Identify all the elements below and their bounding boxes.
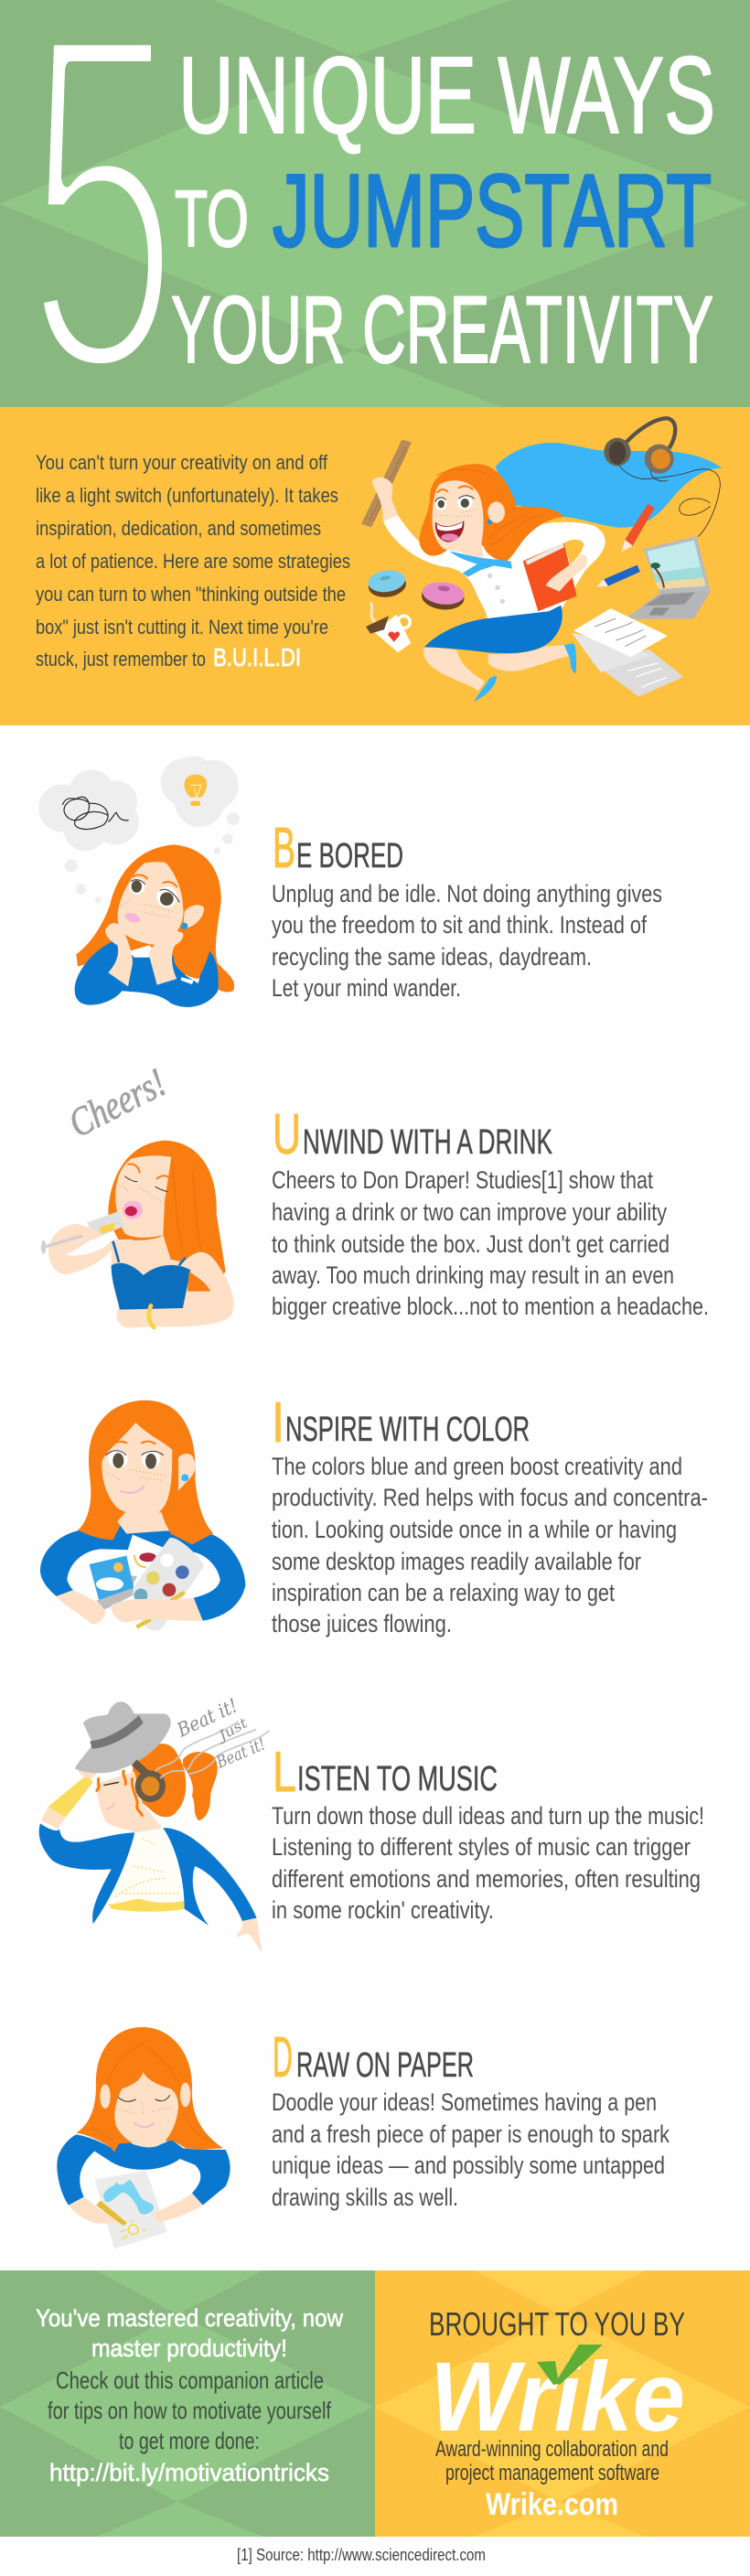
- pencil: [96, 2201, 127, 2226]
- icon: papers: [572, 608, 683, 697]
- hands: [57, 1590, 203, 1624]
- heading: [273, 1741, 498, 1804]
- callout text: to get more done:: [119, 2427, 260, 2454]
- hair strands: [436, 469, 540, 546]
- mouth: [435, 521, 464, 542]
- callout link: http://bit.ly/motivationtricks: [49, 2459, 329, 2486]
- yellow sleeve: [48, 1775, 93, 1818]
- lips: [123, 1201, 143, 1219]
- jacket: [39, 1823, 257, 1926]
- face: [114, 2072, 178, 2147]
- callout headline: [36, 2304, 343, 2362]
- hands: [105, 923, 183, 986]
- intro text: like a light switch (unfortunately). It takes: [36, 484, 338, 507]
- callout text: for tips on how to motivate yourself: [48, 2397, 332, 2424]
- body text: those juices flowing.: [272, 1610, 452, 1637]
- straps: [112, 1241, 186, 1265]
- cuff: [181, 977, 194, 984]
- face: [433, 480, 484, 553]
- hair: [78, 1401, 213, 1544]
- illustration: woman holding palette: [40, 1401, 245, 1631]
- heading: ISTEN TO MUSIC: [297, 1760, 498, 1798]
- headphones: [134, 1763, 166, 1802]
- icon: red pencil: [621, 504, 655, 552]
- heading: [273, 1103, 552, 1166]
- blouse: [383, 515, 605, 619]
- blouse: [109, 1828, 186, 1912]
- callout headline: You've mastered creativity, now: [36, 2304, 343, 2332]
- body text: [272, 2088, 670, 2211]
- closed eyes and freckles: [119, 1165, 169, 1205]
- body text: Doodle your ideas! Sometimes having a pen: [272, 2088, 657, 2116]
- panel: introduction: [0, 407, 750, 725]
- body text: recycling the same ideas, daydream.: [272, 943, 592, 971]
- buttons: [488, 574, 505, 604]
- illustration: woman drawing: [57, 2027, 230, 2249]
- face and neck: [96, 1772, 162, 1839]
- sweater: [75, 939, 219, 1007]
- blue top: [112, 1263, 190, 1310]
- scarf: [450, 552, 512, 577]
- heading: RAW ON PAPER: [296, 2046, 474, 2085]
- body text: unique ideas — and possibly some untapped: [272, 2152, 665, 2179]
- pencil: [136, 1593, 185, 1627]
- hair: [76, 844, 234, 993]
- title line: to: TO: [175, 175, 249, 263]
- eyes: [121, 875, 179, 918]
- front leg: [423, 648, 485, 691]
- sponsor description: Award-winning collaboration and: [435, 2437, 669, 2462]
- gap between arm and body: [564, 540, 584, 564]
- callout headline: master productivity!: [91, 2334, 287, 2362]
- ear and earring: [181, 905, 204, 929]
- intro text: inspiration, dedication, and sometimes: [36, 517, 321, 540]
- source footnote: [1] Source: http://www.sciencedirect.com: [237, 2546, 486, 2564]
- panel: productivity callout: [0, 2270, 375, 2537]
- forearms: [69, 2193, 203, 2224]
- illustration: superhero woman with creative objects: [361, 418, 722, 702]
- intro text: stuck, just remember to: [36, 648, 206, 671]
- wrike logo: Wrike: [430, 2341, 685, 2452]
- panel: brought to you by wrike: [375, 2270, 750, 2537]
- illustration: daydreaming woman: [38, 757, 240, 1007]
- body text: in some rockin' creativity.: [272, 1896, 494, 1924]
- sound waves: [155, 1722, 269, 1778]
- body text: [272, 1802, 704, 1924]
- icon: mug: [366, 602, 411, 652]
- smile: [121, 1486, 144, 1493]
- intro text: B.U.I.L.DI: [213, 643, 301, 671]
- body text: inspiration can be a relaxing way to get: [272, 1579, 615, 1606]
- heading: NSPIRE WITH COLOR: [285, 1411, 530, 1449]
- sponsor description: [435, 2437, 669, 2485]
- heading: [273, 817, 403, 880]
- intro text: a lot of patience. Here are some strategies: [36, 550, 350, 573]
- callout text: [48, 2367, 332, 2454]
- face: [115, 1155, 171, 1238]
- heading: U: [273, 1103, 301, 1166]
- heading: [273, 2026, 474, 2089]
- neck: [455, 542, 483, 558]
- arms and torso: [48, 1224, 233, 1328]
- forearm: [41, 1807, 66, 1829]
- pointing hand: [235, 1918, 262, 1953]
- body text: [272, 880, 662, 1002]
- icon: sky picture: [90, 1556, 134, 1609]
- icon: cape: [496, 443, 722, 528]
- heading: [272, 1391, 530, 1454]
- hair strands: [91, 2043, 217, 2143]
- body text: you the freedom to sit and think. Instead of: [272, 911, 647, 939]
- eyes: [103, 1442, 166, 1480]
- curls: [96, 1770, 142, 1817]
- icon: palette: [133, 1538, 204, 1631]
- skirt: [424, 606, 562, 653]
- icon: ruler: [361, 440, 412, 528]
- icon: headphones: [604, 418, 720, 537]
- handwritten cheers: Cheers!: [61, 1059, 173, 1146]
- hand on hat: [78, 1761, 100, 1777]
- glass: [41, 1211, 124, 1254]
- hair: [419, 464, 564, 562]
- section: draw on paper: [57, 2026, 670, 2249]
- icon: blue pencil: [596, 565, 640, 587]
- heading: D: [273, 2026, 293, 2089]
- heading: NWIND WITH A DRINK: [303, 1123, 552, 1162]
- icon: green check mark: [537, 2345, 603, 2385]
- body text: Let your mind wander.: [272, 974, 461, 1002]
- illustration: woman with hat and headphones: [39, 1694, 269, 1953]
- icon: pink donut: [421, 580, 466, 612]
- scribble: [62, 797, 129, 829]
- lips: [123, 911, 142, 925]
- illustration: woman drinking: [41, 1059, 233, 1328]
- hair front strand: [165, 853, 220, 979]
- icon: blue donut: [367, 568, 408, 599]
- heading: I: [272, 1391, 284, 1454]
- hair strands: [171, 1155, 201, 1250]
- heading: L: [273, 1741, 296, 1804]
- closed eye and smile: [103, 1782, 119, 1809]
- body text: Unplug and be idle. Not doing anything gives: [272, 880, 662, 907]
- section: be bored: [38, 757, 662, 1007]
- figure: [41, 1141, 233, 1328]
- ear and earring: [178, 1454, 195, 1491]
- sleeves: [40, 1521, 245, 1621]
- icon: paper with fruit: [119, 1535, 163, 1585]
- handwritten lyric: just: Just: [213, 1714, 252, 1745]
- handwritten lyric: beat it: Beat it!: [173, 1694, 241, 1742]
- hand: [79, 1226, 101, 1240]
- sweater: [57, 2134, 230, 2206]
- face: [118, 862, 184, 945]
- hair: [108, 1141, 226, 1292]
- eyes: [435, 487, 477, 517]
- section: unwind with a drink: [41, 1059, 709, 1328]
- sponsor url: Wrike.com: [486, 2487, 618, 2522]
- section: listen to music: [39, 1694, 704, 1953]
- forearm and hand: [546, 554, 587, 592]
- raised arm: [372, 478, 400, 521]
- icon: laptop: [626, 536, 711, 619]
- intro text: You can't turn your creativity on and off: [36, 451, 328, 474]
- handwritten lyric: beat it again: Beat it!: [213, 1734, 269, 1773]
- heading: B: [273, 817, 295, 880]
- intro text: box" just isn't cutting it. Next time you're: [36, 616, 328, 639]
- closed eyes and freckles: [116, 2096, 171, 2115]
- ponytail: [183, 1752, 218, 1820]
- shoes: [474, 643, 576, 702]
- thought clouds: [38, 757, 240, 903]
- sponsor description: project management software: [445, 2461, 659, 2485]
- icon: light bulb: [184, 775, 207, 806]
- body text: [272, 1166, 709, 1320]
- smile: [134, 2123, 154, 2127]
- body text: some desktop images readily available for: [272, 1548, 641, 1575]
- body text: Cheers to Don Draper! Studies[1] show that: [272, 1166, 653, 1194]
- section: inspire with color: [40, 1391, 708, 1637]
- icon: sheet of paper with doodle: [94, 2171, 167, 2249]
- body text: drawing skills as well.: [272, 2184, 458, 2211]
- body text: [272, 1453, 708, 1637]
- back leg: [488, 645, 572, 671]
- hair: [76, 2027, 223, 2152]
- intro text: [36, 451, 350, 671]
- intro text: you can turn to when "thinking outside the: [36, 583, 346, 606]
- ears: [100, 2083, 190, 2109]
- callout text: Check out this companion article: [56, 2367, 324, 2394]
- bracelet: [149, 1305, 154, 1327]
- hands: [99, 2211, 167, 2224]
- hair: [133, 1744, 186, 1817]
- lower hair: [188, 1272, 210, 1292]
- heading: E BORED: [296, 837, 403, 875]
- icon: book: [523, 542, 577, 611]
- panel: title header: [0, 0, 750, 407]
- face: [102, 1422, 172, 1515]
- hat: [75, 1701, 171, 1773]
- neck: [117, 1512, 167, 1534]
